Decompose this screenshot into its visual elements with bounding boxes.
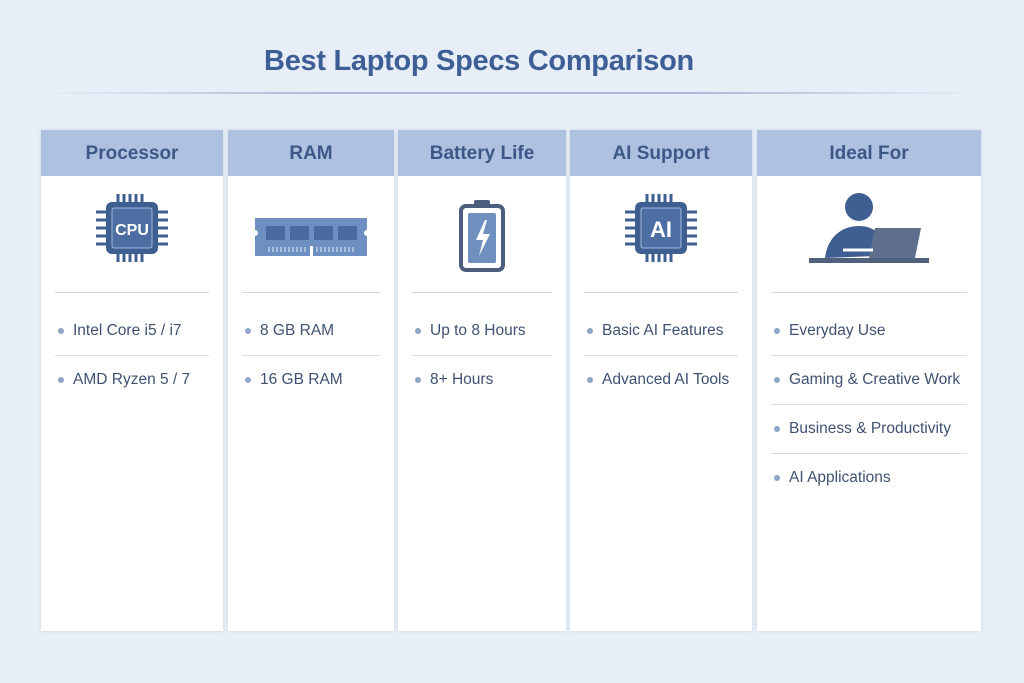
panel: ideal for (757, 130, 981, 631)
panel: ai support: AI Support (612, 143, 710, 164)
panel: battery: 8+ Hours (430, 371, 493, 388)
panel: processor (41, 130, 223, 631)
panel: battery: Battery Life (430, 143, 534, 164)
panel: ram (228, 130, 394, 631)
icon: ai chip: AI (650, 217, 672, 242)
title: Best Laptop Specs Comparison (264, 45, 694, 77)
icon: cpu: CPU (115, 222, 149, 239)
panel: ram: RAM (289, 143, 333, 164)
panel: ideal for: Everyday Use (789, 322, 885, 339)
panel: processor: AMD Ryzen 5 / 7 (73, 371, 190, 388)
icon: ram (255, 218, 367, 256)
icon: cpu (96, 194, 168, 262)
panel: ideal for: AI Applications (789, 469, 891, 486)
panel: ram: 8 GB RAM (260, 322, 334, 339)
panel: ai support: Advanced AI Tools (602, 371, 729, 388)
icon: ai chip (625, 194, 697, 262)
panel: ram: 16 GB RAM (260, 371, 343, 388)
panel: battery (398, 130, 566, 631)
panel: battery: Up to 8 Hours (430, 322, 526, 339)
panel: processor: Intel Core i5 / i7 (73, 322, 182, 339)
panel: ideal for: Business & Productivity (789, 420, 951, 437)
panel: ideal for: Ideal For (829, 143, 909, 164)
panel: ai support: Basic AI Features (602, 322, 723, 339)
panel: processor: Processor (86, 143, 178, 164)
icon: person at laptop (809, 193, 929, 263)
panel: ai support (570, 130, 752, 631)
icon: battery (459, 200, 505, 272)
panel: ideal for: Gaming & Creative Work (789, 371, 960, 388)
